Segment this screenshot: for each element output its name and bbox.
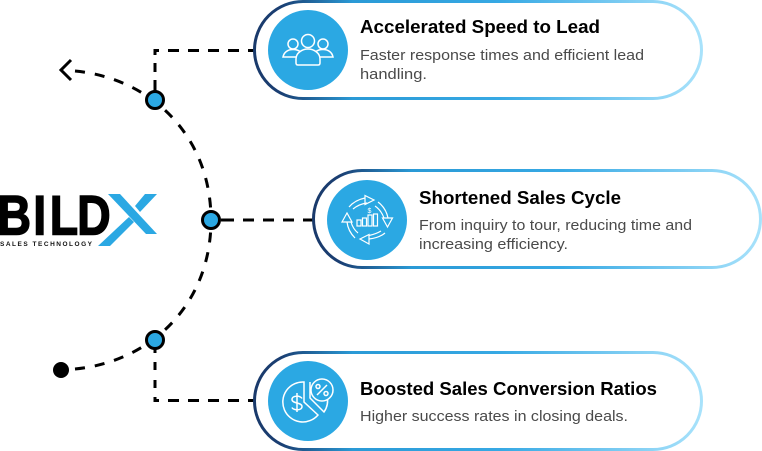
pill outline — [314, 170, 760, 268]
node: top — [146, 92, 164, 108]
heading: Boosted Sales Conversion Ratios — [360, 379, 657, 399]
logo tagline: SALES TECHNOLOGY — [0, 241, 93, 248]
logo — [0, 183, 157, 248]
icon: cycle chart: $ — [368, 208, 372, 215]
description: handling. — [360, 67, 427, 83]
start dot — [53, 362, 69, 378]
description: From inquiry to tour, reducing time and — [419, 218, 692, 234]
node: middle — [202, 212, 220, 228]
connector: bottom — [154, 348, 259, 402]
logo wordmark: BILD — [0, 183, 111, 246]
icon: people — [268, 10, 348, 90]
connector: middle — [221, 218, 316, 222]
description: Faster response times and efficient lead — [360, 48, 644, 64]
connector: top — [154, 49, 259, 92]
heading: Shortened Sales Cycle — [419, 188, 621, 208]
node: bottom — [146, 332, 164, 348]
description: Higher success rates in closing deals. — [360, 409, 628, 425]
panel: conversion ratios — [254, 352, 702, 450]
heading: Accelerated Speed to Lead — [360, 17, 600, 37]
icon: cycle chart — [327, 180, 407, 260]
icon: pie chart with percent — [268, 361, 348, 441]
pill outline — [254, 2, 702, 98]
description: increasing efficiency. — [419, 237, 568, 253]
logo X mark — [98, 194, 157, 246]
timeline arc — [75, 71, 211, 369]
panel: speed to lead — [254, 2, 702, 98]
pill outline — [254, 352, 702, 450]
panel: sales cycle — [314, 170, 760, 268]
arrow head — [61, 60, 71, 80]
